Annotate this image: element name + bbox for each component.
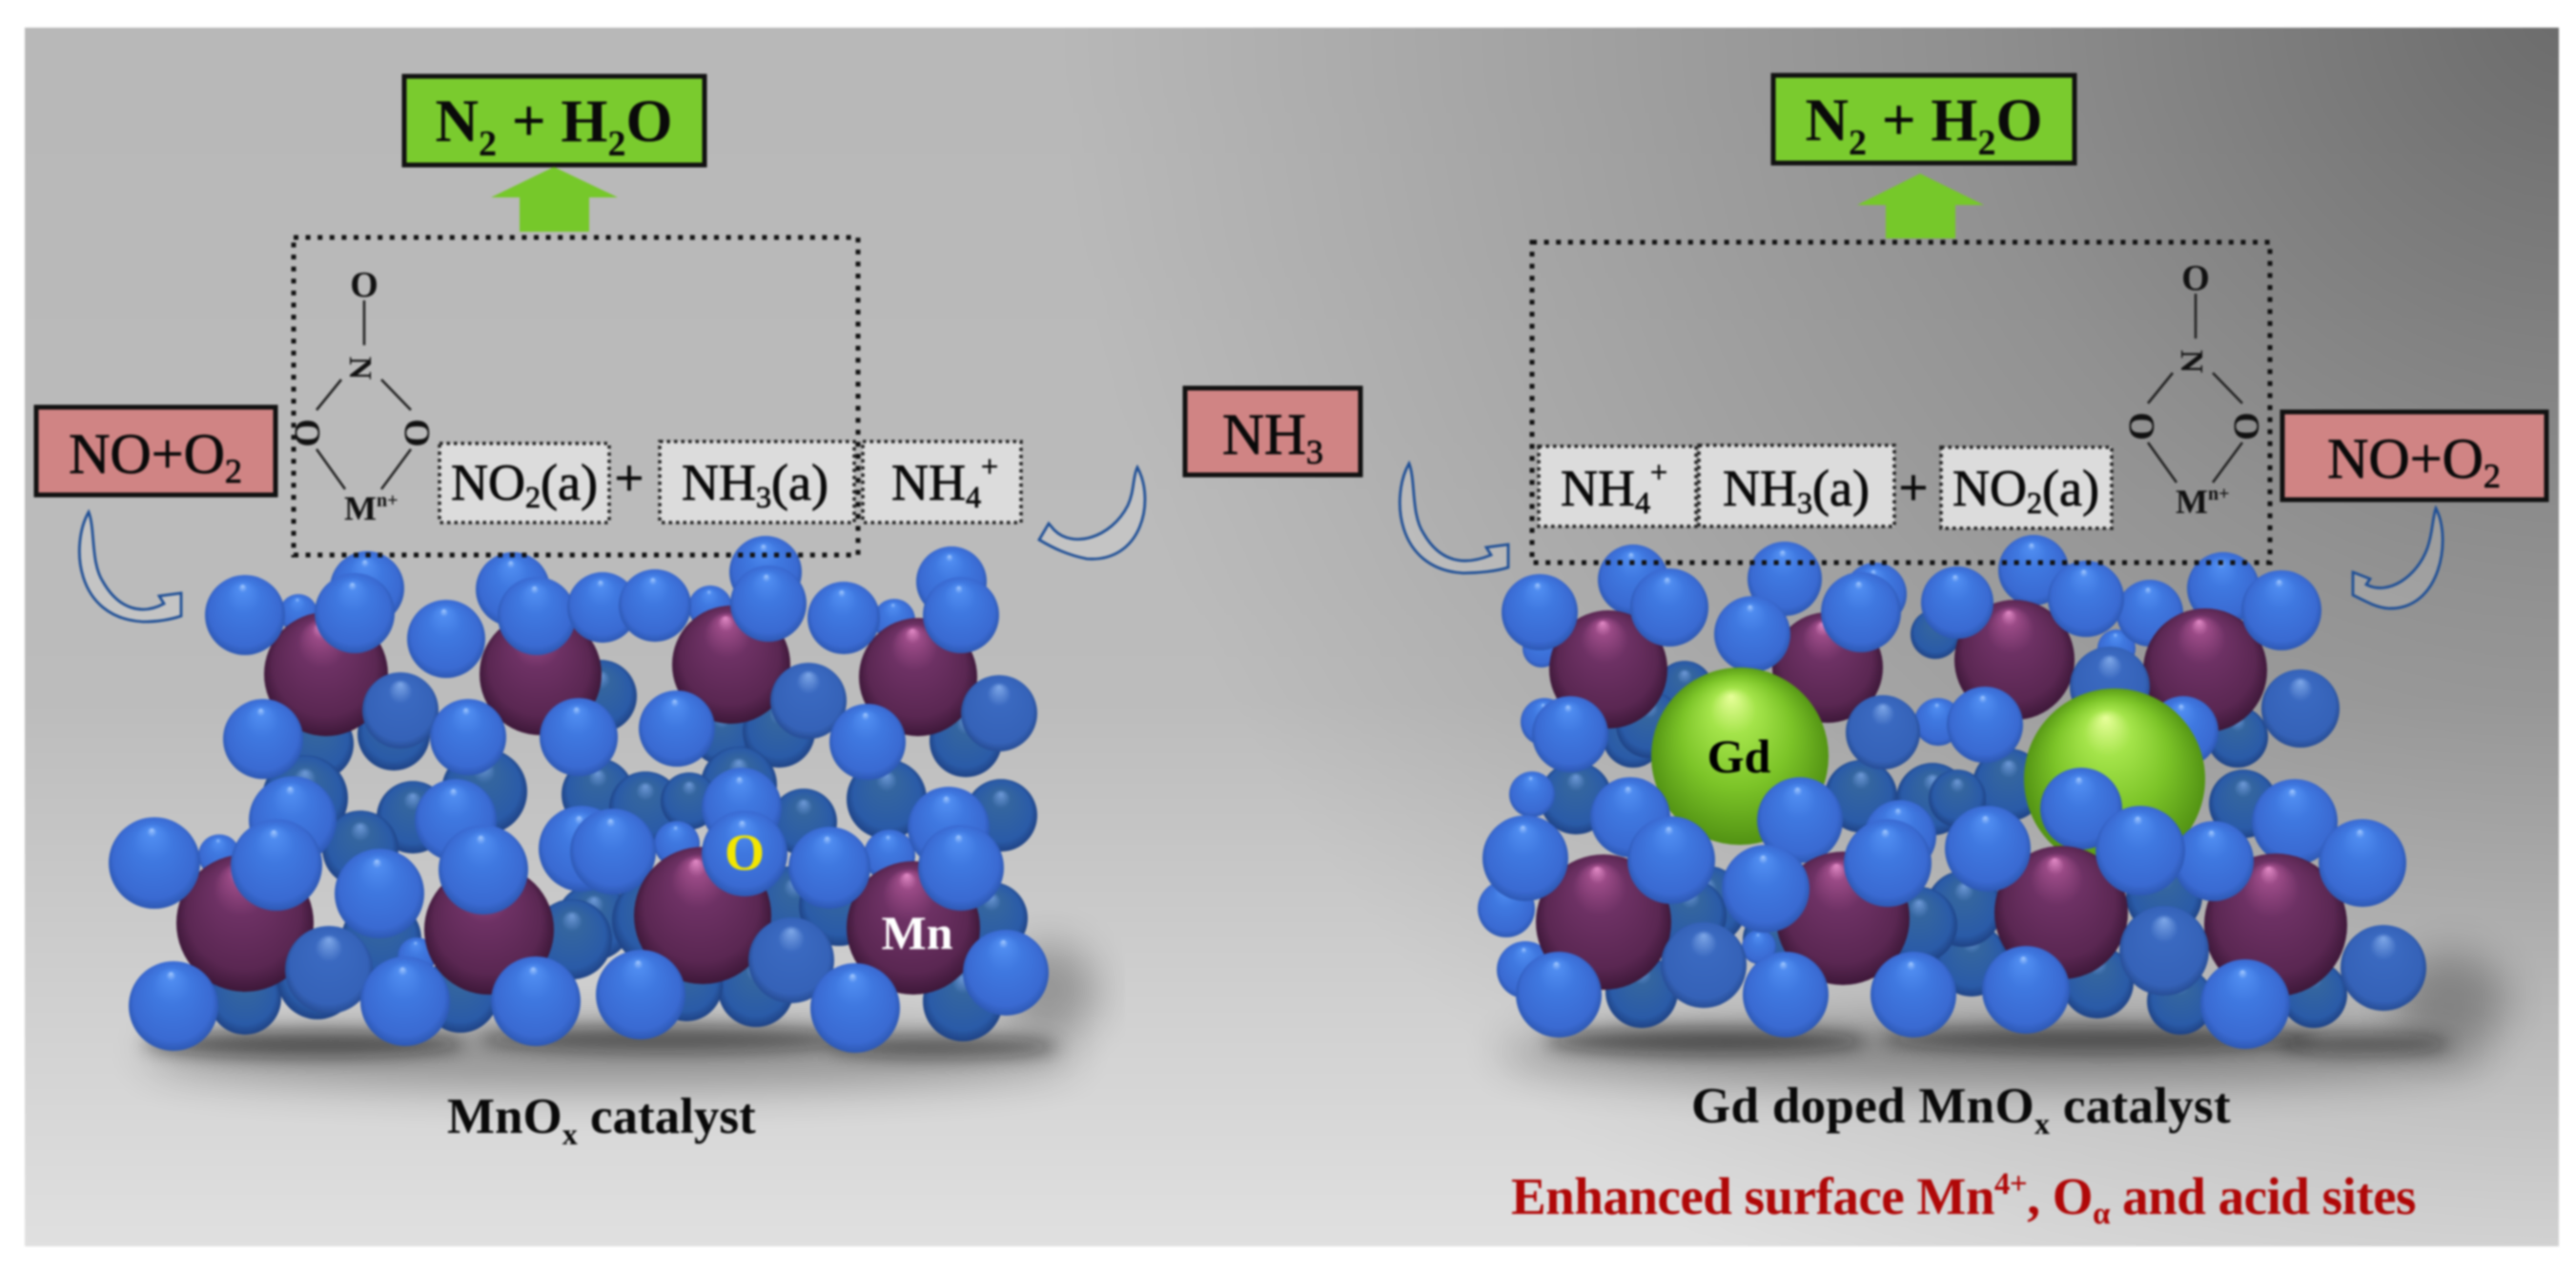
atom: Gd sphere 2: [2024, 688, 2205, 870]
atom cluster: Gd doped MnOx catalyst: [1478, 535, 2426, 1049]
product box left: N2 + H2O: 2: [607, 124, 625, 164]
product box right: N2 + H2O: O: [1995, 87, 2042, 154]
species box: NH3(a) left: 3: [756, 480, 771, 514]
caption: MnOx catalyst: MnO: [447, 1089, 562, 1144]
adsorbed nitrate species left: n+: [377, 490, 399, 511]
plus sign right: +: [1898, 459, 1929, 518]
species box: NO2(a) left: (a): [541, 454, 598, 511]
callout: enhanced surface sites: and acid sites: [2110, 1167, 2416, 1225]
product box right: N2 + H2O: N: [1806, 87, 1849, 154]
adsorbed nitrate species right: n+: [2208, 483, 2230, 504]
species box: NH4+ left: +: [981, 449, 998, 483]
reactant box: NO+O2 left: 2: [225, 452, 242, 490]
species box: NO2(a) left: NO: [451, 454, 525, 511]
curved arrow: NO+O2 into right catalyst: [2353, 508, 2443, 608]
dotted reaction box right: [1532, 242, 2270, 563]
shadow: left cluster: [143, 944, 1096, 1089]
species box: NH3(a) left: NH: [682, 454, 756, 511]
curved arrow: NO+O2 into left catalyst: [79, 512, 181, 622]
adsorbed nitrate species left: O: [397, 419, 437, 447]
species box: NH4+ left: NH: [891, 454, 966, 511]
arrow: up to products left: [491, 167, 618, 232]
curved arrow: NH3 into right catalyst: [1400, 463, 1508, 573]
product box left: N2 + H2O: + H: [497, 88, 607, 154]
adsorbed nitrate species right: O: [2226, 412, 2266, 441]
reactant box: NO+O2 left: NO+O: [69, 422, 225, 485]
caption: Gd doped MnOx catalyst: Gd doped MnO: [1691, 1079, 2034, 1134]
species box: NH4+ left: [863, 442, 1021, 523]
product box left: N2 + H2O: O: [625, 88, 672, 154]
atom: Gd sphere 1: [1651, 668, 1829, 845]
species box: NH3(a) right: [1699, 445, 1894, 526]
product box left: N2 + H2O: N: [436, 88, 479, 154]
callout: enhanced surface sites: , O: [2027, 1167, 2093, 1225]
reactant box: NO+O2 right: 2: [2484, 457, 2501, 495]
adsorbed nitrate species right: M: [2176, 483, 2208, 521]
atom label: O: O: [725, 824, 765, 881]
adsorbed nitrate species left: O: [350, 265, 378, 305]
atom cluster: MnOx catalyst: [109, 536, 1049, 1053]
dotted reaction box left: [294, 237, 858, 555]
reactant box: NO+O2 left: [36, 407, 276, 495]
adsorbed nitrate species right: O: [2181, 258, 2210, 298]
caption: MnOx catalyst: catalyst: [578, 1089, 756, 1144]
callout: enhanced surface sites: Enhanced surface Mn: [1511, 1167, 1994, 1225]
species box: NH4+ right: +: [1650, 455, 1667, 489]
adsorbed nitrate species right: [2121, 258, 2266, 521]
species box: NO2(a) right: NO: [1952, 460, 2027, 517]
product box right: N2 + H2O: [1773, 75, 2075, 163]
species box: NH4+ right: NH: [1561, 460, 1635, 517]
reactant box: NH3: 3: [1306, 433, 1323, 471]
reactant box: NH3: [1185, 388, 1360, 475]
callout: enhanced surface sites: 4+: [1994, 1167, 2027, 1202]
atom label: Mn: Mn: [881, 906, 953, 959]
adsorbed nitrate species left: N: [342, 357, 378, 380]
curved arrow: NH3 into left catalyst: [1039, 467, 1145, 559]
shadow: right cluster: [1497, 954, 2507, 1086]
species box: NO2(a) right: [1941, 447, 2112, 528]
adsorbed nitrate species right: N: [2174, 350, 2209, 374]
species box: NH3(a) right: (a): [1812, 460, 1870, 517]
product box right: N2 + H2O: 2: [1977, 123, 1995, 163]
species box: NH3(a) left: [660, 442, 854, 523]
adsorbed nitrate species left: O: [287, 419, 327, 447]
plus sign left: +: [614, 449, 644, 508]
species box: NH3(a) left: (a): [771, 454, 828, 511]
callout: enhanced surface sites: α: [2093, 1197, 2111, 1231]
adsorbed nitrate species left: M: [344, 489, 377, 527]
species box: NH4+ right: [1539, 446, 1696, 526]
caption: Gd doped MnOx catalyst: x: [2034, 1106, 2050, 1140]
reactant box: NO+O2 right: [2282, 412, 2546, 500]
species box: NO2(a) left: 2: [525, 480, 541, 514]
caption: Gd doped MnOx catalyst: catalyst: [2050, 1079, 2231, 1134]
product box left: N2 + H2O: 2: [479, 124, 497, 164]
species box: NH3(a) right: NH: [1723, 460, 1797, 517]
arrow: up to products right: [1857, 174, 1984, 238]
species box: NO2(a) right: 2: [2027, 485, 2042, 520]
product box left: N2 + H2O: [404, 76, 705, 165]
species box: NO2(a) left: [440, 443, 609, 523]
reactant box: NH3: NH: [1222, 403, 1306, 467]
species box: NH4+ right: 4: [1635, 485, 1650, 520]
atom label: Gd: Gd: [1707, 729, 1771, 783]
species box: NH3(a) right: 3: [1797, 485, 1812, 520]
species box: NH4+ left: 4: [966, 480, 981, 514]
species box: NO2(a) right: (a): [2042, 460, 2099, 517]
adsorbed nitrate species right: O: [2121, 412, 2161, 441]
adsorbed nitrate species left: [287, 265, 437, 527]
reactant box: NO+O2 right: NO+O: [2327, 427, 2484, 490]
product box right: N2 + H2O: 2: [1849, 123, 1867, 163]
product box right: N2 + H2O: + H: [1867, 87, 1977, 154]
caption: MnOx catalyst: x: [562, 1117, 578, 1151]
